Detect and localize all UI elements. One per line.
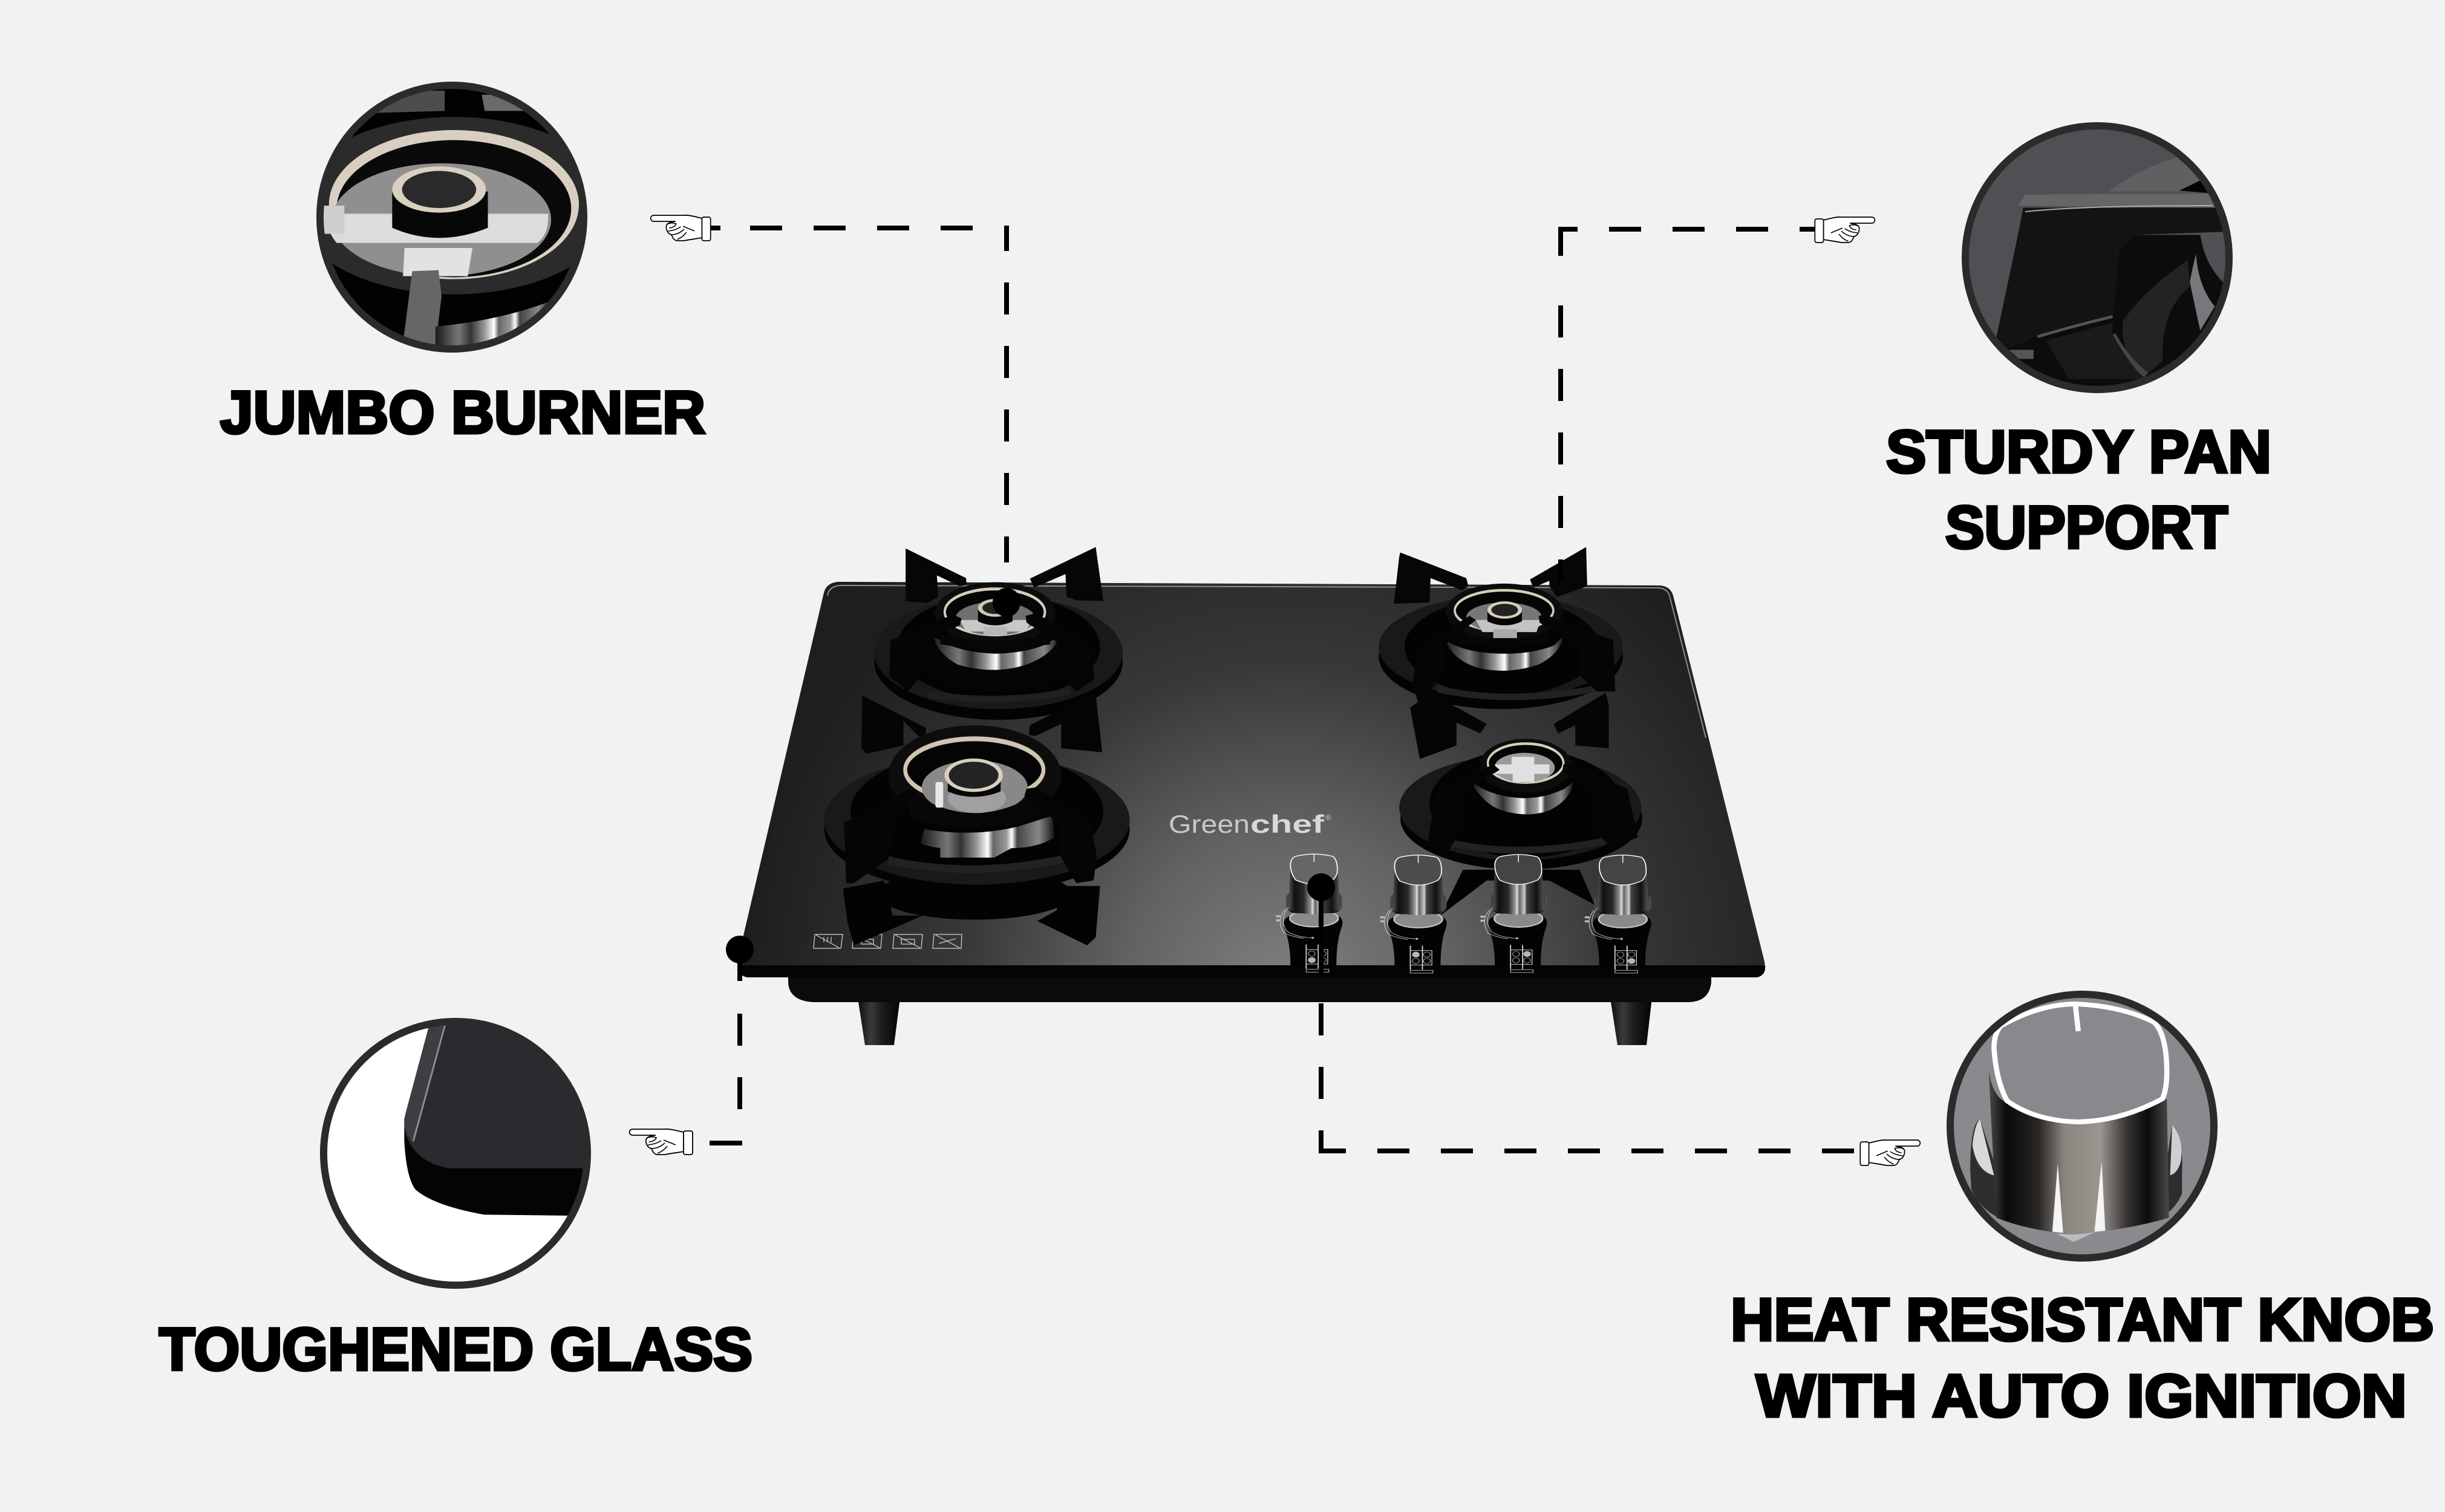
front right small burner (1399, 693, 1642, 916)
front left jumbo burner (824, 693, 1129, 945)
pointer hand: sturdy pan support (1815, 217, 1875, 243)
knob 3 (1480, 855, 1547, 973)
detail image: pan support (1969, 129, 2225, 386)
callout: jumbo burner (316, 82, 587, 353)
logo: ® (1325, 813, 1331, 822)
pointer hand: heat resistant knob (1860, 1140, 1920, 1165)
knob 2 (1380, 855, 1447, 973)
heading: heat resistant knob with auto ignition (1731, 1286, 2434, 1429)
hob base tray (788, 971, 1711, 1002)
pointer hand: toughened glass (630, 1129, 693, 1155)
heading: sturdy pan support: SUPPORT (1945, 494, 2228, 561)
heading: sturdy pan support (1886, 418, 2271, 561)
knob 1 (1276, 854, 1342, 972)
glass front edge (738, 965, 1765, 977)
logo (1169, 810, 1331, 838)
callout: sturdy pan support (1962, 122, 2233, 393)
callout: toughened glass (320, 1018, 591, 1289)
logo: Green (1169, 810, 1250, 838)
detail image: glass corner (327, 1025, 584, 1282)
callout: heat resistant knob (1947, 991, 2218, 1262)
connector: heat resistant knob (1307, 873, 1854, 1151)
heading: jumbo burner: JUMBO BURNER (220, 379, 705, 446)
ring (1950, 994, 2214, 1258)
heading: sturdy pan support: STURDY PAN (1886, 418, 2271, 485)
safety symbols (814, 934, 962, 948)
burners right column (1379, 547, 1642, 916)
ring (1965, 126, 2229, 389)
ring (320, 85, 584, 349)
ring (324, 1022, 587, 1285)
heading: heat resistant knob with auto ignition: HEAT RESISTANT KNOB (1731, 1286, 2434, 1353)
control knobs (1276, 854, 1651, 973)
knob 4 (1585, 855, 1651, 973)
detail image: burner (324, 89, 580, 345)
connector: sturdy pan support (1558, 227, 1815, 581)
connector: jumbo burner (710, 228, 1020, 617)
burners left column (824, 547, 1129, 945)
pointer hand: jumbo burner (651, 215, 711, 241)
rear right burner (1379, 547, 1623, 709)
connector: toughened glass (710, 936, 754, 1143)
heading: toughened glass: TOUGHENED GLASS (159, 1315, 752, 1383)
logo: chef (1250, 810, 1325, 838)
glass rim highlight (828, 585, 1706, 738)
rear left burner (874, 547, 1123, 720)
glass top (737, 582, 1765, 969)
heading: heat resistant knob with auto ignition: WITH AUTO IGNITION (1756, 1362, 2407, 1429)
detail image: knob (1954, 998, 2210, 1254)
gas hob product (737, 547, 1765, 1045)
hob legs (858, 998, 1652, 1045)
